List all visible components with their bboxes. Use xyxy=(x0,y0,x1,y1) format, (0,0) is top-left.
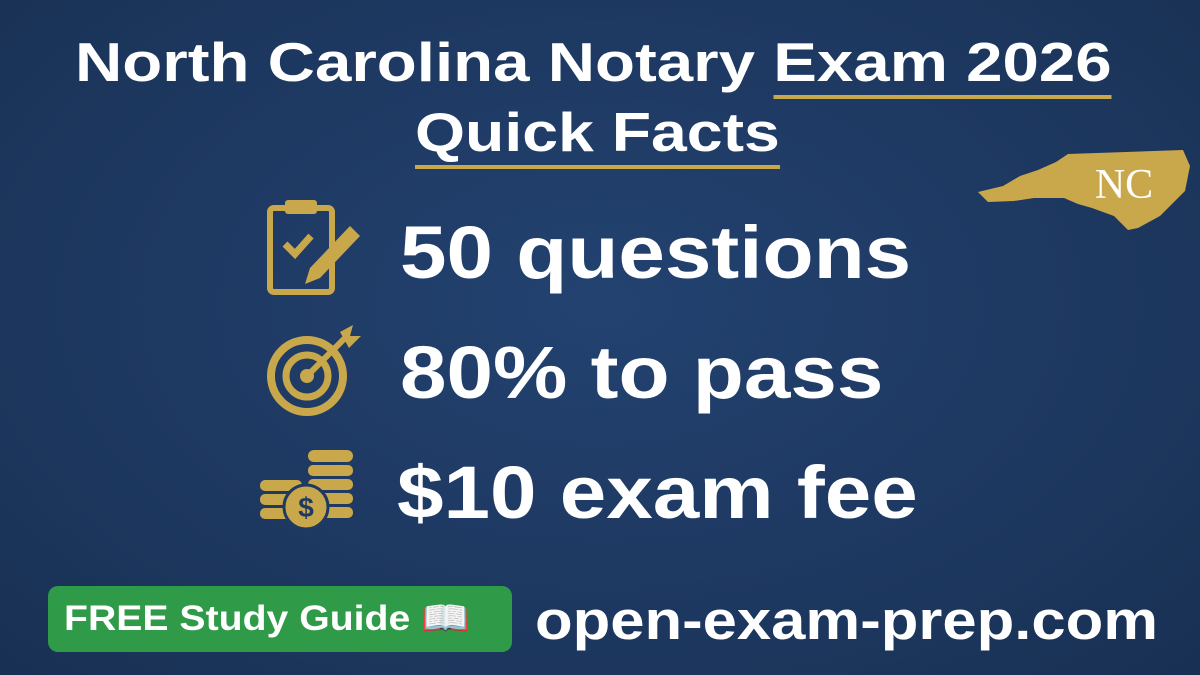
subtitle: Quick Facts xyxy=(415,101,780,163)
NC map xyxy=(978,150,1190,230)
url: open-exam-prep.com xyxy=(535,589,1158,651)
title: North Carolina Notary Exam 2026 xyxy=(75,31,1112,93)
icon: target xyxy=(267,325,361,416)
NC map: NC xyxy=(1095,162,1153,208)
badge: FREE Study Guide 📖 xyxy=(64,599,470,638)
fact 3: $10 exam fee xyxy=(397,451,918,534)
badge xyxy=(48,586,512,652)
icon: clipboard xyxy=(267,200,360,295)
icon: coins xyxy=(260,450,353,528)
fact 1: 50 questions xyxy=(400,211,911,294)
fact 2: 80% to pass xyxy=(400,331,883,414)
icon: coins: $ xyxy=(298,492,314,523)
